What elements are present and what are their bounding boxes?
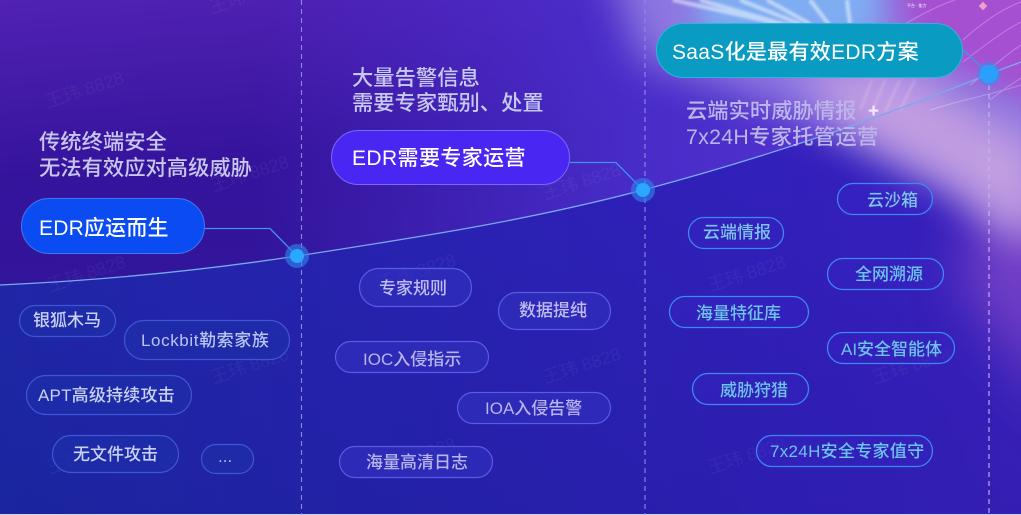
tag: 银狐木马: 银狐木马	[33, 311, 101, 330]
heading pill: EDR应运而生: EDR应运而生	[39, 217, 169, 240]
tag: 云端情报	[688, 218, 784, 248]
tag: 海量高清日志	[340, 446, 492, 478]
column 1 description: 无法有效应对高级威胁	[39, 156, 252, 180]
tag: 海量高清日志: 海量高清日志	[366, 453, 468, 472]
tag: AI安全智能体	[828, 332, 954, 364]
tag: 专家规则: 专家规则	[379, 278, 447, 298]
watermarks: 王玮 8828	[375, 250, 458, 294]
dashed column dividers	[302, 0, 989, 515]
tag: 数据提纯	[498, 292, 610, 330]
heading pill: SaaS化是最有效EDR方案: SaaS化是最有效EDR方案	[672, 41, 919, 64]
tag: 专家规则	[360, 268, 472, 306]
heading pill: SaaS化是最有效EDR方案	[656, 24, 962, 78]
watermarks: 王玮 8828	[705, 252, 788, 296]
node 3	[977, 62, 1001, 86]
tag: 威胁狩猎: 威胁狩猎	[720, 381, 788, 400]
watermarks: 王玮 8828	[705, 434, 788, 478]
watermarks: 王玮 8828	[45, 252, 128, 296]
tag: 威胁狩猎	[692, 374, 808, 404]
tag: 无文件攻击	[52, 436, 178, 472]
watermarks: 王玮 8828	[43, 68, 126, 112]
tag: more	[202, 444, 254, 474]
tag: 海量特征库: 海量特征库	[696, 304, 781, 323]
column 3 description: +	[868, 101, 879, 122]
tag: more: ...	[218, 447, 232, 466]
tag: 银狐木马	[20, 306, 116, 336]
tags: expert operations	[336, 268, 610, 478]
tag: IOC入侵指示	[336, 342, 488, 372]
heading pill: EDR应运而生	[22, 198, 204, 254]
column 1 description	[39, 130, 252, 180]
tag: 云端情报: 云端情报	[703, 223, 771, 242]
tag: APT高级持续攻击	[26, 376, 192, 414]
tag: 云沙箱	[838, 184, 932, 214]
column 1 description: 传统终端安全	[39, 130, 167, 154]
tag: APT高级持续攻击: APT高级持续攻击	[38, 386, 175, 405]
tag: Lockbit勒索家族	[124, 320, 290, 360]
tag: 云沙箱: 云沙箱	[867, 191, 918, 210]
tag: IOC入侵指示: IOC入侵指示	[363, 350, 461, 369]
watermarks: 王玮 8828	[208, 344, 291, 388]
node 1	[285, 244, 309, 268]
watermarks: 王玮 8828	[208, 152, 291, 196]
tag: 无文件攻击: 无文件攻击	[73, 445, 158, 464]
column 3 description: 云端实时威胁情报	[686, 99, 856, 123]
tag: 7x24H安全专家值守: 7x24H安全专家值守	[770, 441, 924, 461]
tag: 海量特征库	[670, 296, 808, 328]
tag: IOA入侵告警: IOA入侵告警	[485, 399, 582, 418]
tag: Lockbit勒索家族: Lockbit勒索家族	[141, 330, 269, 350]
tag: 全网溯源	[828, 258, 944, 290]
tag: 全网溯源: 全网溯源	[855, 264, 923, 284]
small top label: 平台 · 能力	[907, 2, 927, 8]
pink marker	[979, 2, 987, 10]
tags: threats	[20, 306, 290, 474]
column 2 description	[352, 66, 544, 115]
node 2	[631, 178, 655, 202]
tags: SaaS capabilities	[670, 184, 954, 466]
watermarks: 王玮 8828	[540, 160, 623, 204]
heading pill: EDR需要专家运营	[332, 130, 570, 184]
tag: 数据提纯: 数据提纯	[519, 301, 587, 320]
tag: AI安全智能体: AI安全智能体	[841, 339, 942, 359]
growth curve	[0, 62, 1021, 285]
connectors	[204, 50, 989, 256]
watermarks: 王玮 8828	[45, 434, 128, 478]
watermarks: 王玮 8828	[870, 344, 953, 388]
watermarks: 王玮 8828	[375, 434, 458, 478]
heading pill: EDR需要专家运营: EDR需要专家运营	[352, 147, 526, 170]
tag: 7x24H安全专家值守	[756, 436, 932, 466]
watermarks: 王玮 8828	[540, 344, 623, 388]
column 2 description: 需要专家甄别、处置	[352, 91, 544, 115]
tag: IOA入侵告警	[458, 392, 610, 424]
column 2 description: 大量告警信息	[352, 66, 480, 90]
column 3 description	[686, 99, 879, 149]
column 3 description: 7x24H专家托管运营	[686, 125, 879, 149]
